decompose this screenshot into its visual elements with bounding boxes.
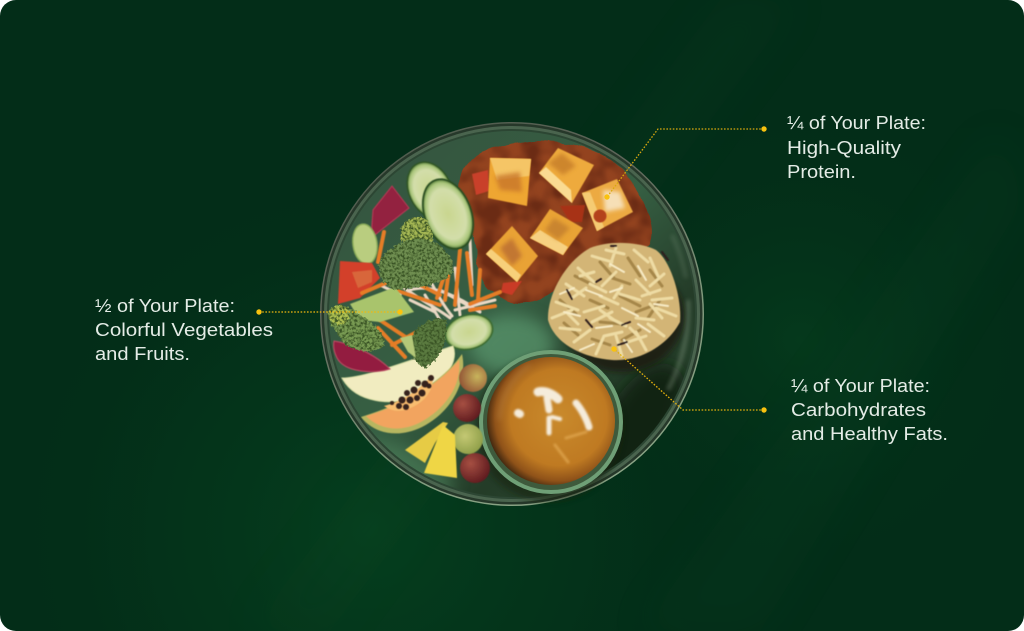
- paneer cube left: [486, 226, 538, 282]
- cucumber front slice: [414, 172, 482, 256]
- beetroot slice bottom: [334, 341, 390, 372]
- leader line bottom right: [611, 346, 767, 413]
- cucumber chunk: [350, 223, 380, 265]
- label text top right: High-Quality: [787, 138, 901, 158]
- paneer cube right: [582, 179, 633, 231]
- label text left: [95, 296, 273, 364]
- callout: quarter plate protein: [604, 113, 926, 200]
- label text left: Colorful Vegetables: [95, 320, 273, 340]
- broccoli left: [328, 305, 384, 351]
- food: paneer curry (protein): [460, 141, 651, 303]
- label text top right: [787, 113, 926, 182]
- plate: [320, 122, 704, 509]
- label text bottom right: and Healthy Fats.: [791, 424, 948, 444]
- paneer cube centre: [530, 209, 583, 255]
- celery under right broccoli: [400, 335, 416, 358]
- label text left: ½ of Your Plate:: [95, 296, 235, 316]
- broccoli right: [410, 319, 446, 368]
- tomato wedge: [338, 261, 380, 304]
- curry sauce: [460, 141, 651, 303]
- label text top right: ¼ of Your Plate:: [787, 113, 926, 133]
- broccoli large: [379, 217, 453, 290]
- food: rice (carbohydrates): [548, 243, 684, 372]
- papaya seeds: [390, 375, 434, 410]
- label text bottom right: [791, 376, 948, 444]
- pineapple wedges: [405, 422, 457, 478]
- beetroot wedge top: [371, 186, 409, 238]
- label text left: and Fruits.: [95, 344, 190, 364]
- cucumber round slice: [441, 309, 497, 355]
- paneer cube top: [488, 158, 531, 206]
- label text top right: Protein.: [787, 162, 856, 182]
- callout: half plate vegetables and fruits: [95, 296, 403, 364]
- cucumber back slice: [399, 155, 461, 225]
- rice grains: [552, 246, 676, 356]
- tomato pieces: [472, 170, 489, 195]
- food: vegetables and fruits: [328, 155, 500, 483]
- label text bottom right: Carbohydrates: [791, 400, 926, 420]
- papaya: [361, 354, 463, 433]
- carrot and onion shreds: [362, 232, 500, 357]
- apple slice: [342, 346, 454, 402]
- food: soup bowl: [475, 350, 623, 502]
- grapes: [453, 364, 490, 483]
- callout: quarter plate carbohydrates: [611, 346, 948, 444]
- label text bottom right: ¼ of Your Plate:: [791, 376, 930, 396]
- celery chunk: [350, 287, 414, 322]
- leader line top right: [604, 126, 767, 200]
- cream swirl: [518, 392, 589, 462]
- paneer cube upper middle: [539, 148, 594, 203]
- leader line left: [256, 309, 403, 315]
